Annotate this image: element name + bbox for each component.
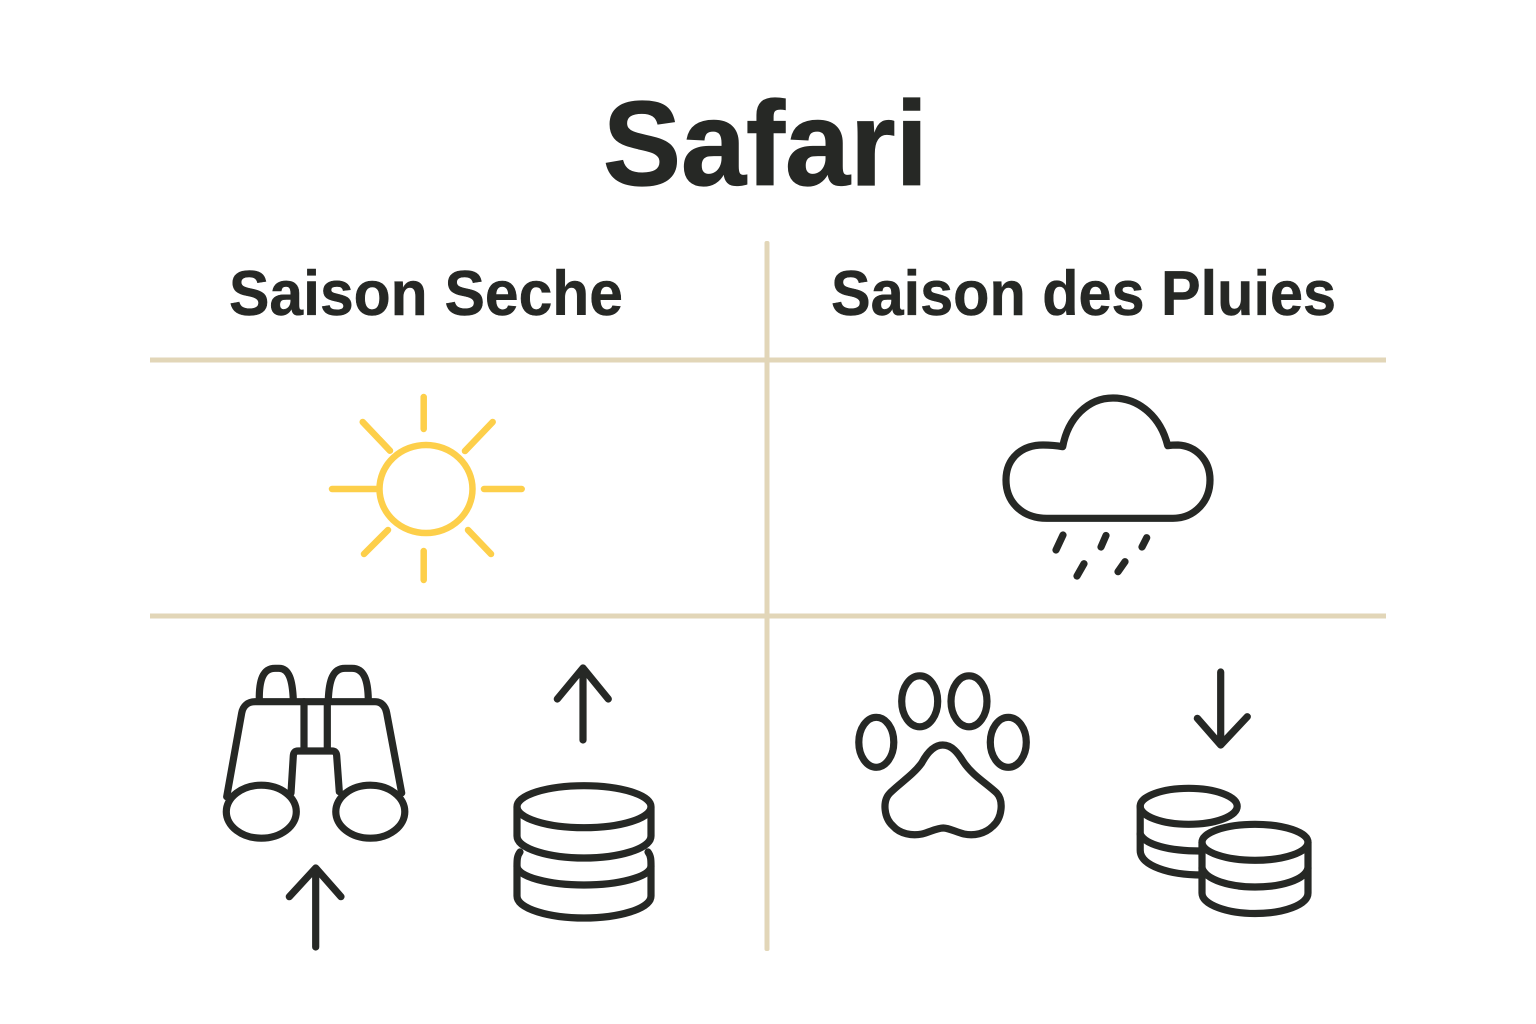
icon: binoculars [226, 668, 405, 838]
arrow: up, prices [557, 668, 608, 740]
heading: rainy season: Saison des Pluies [831, 259, 1336, 329]
icon: low coin stacks [1140, 788, 1308, 914]
title: Safari [603, 77, 928, 211]
icon: sun [332, 397, 522, 580]
heading: dry season: Saison Seche [229, 259, 623, 329]
arrow: down, prices [1197, 672, 1247, 745]
arrow: up, sightings [289, 868, 341, 947]
icon: rain cloud [1006, 398, 1210, 576]
icon: paw print [859, 676, 1026, 835]
icon: tall coin stack [517, 786, 651, 918]
